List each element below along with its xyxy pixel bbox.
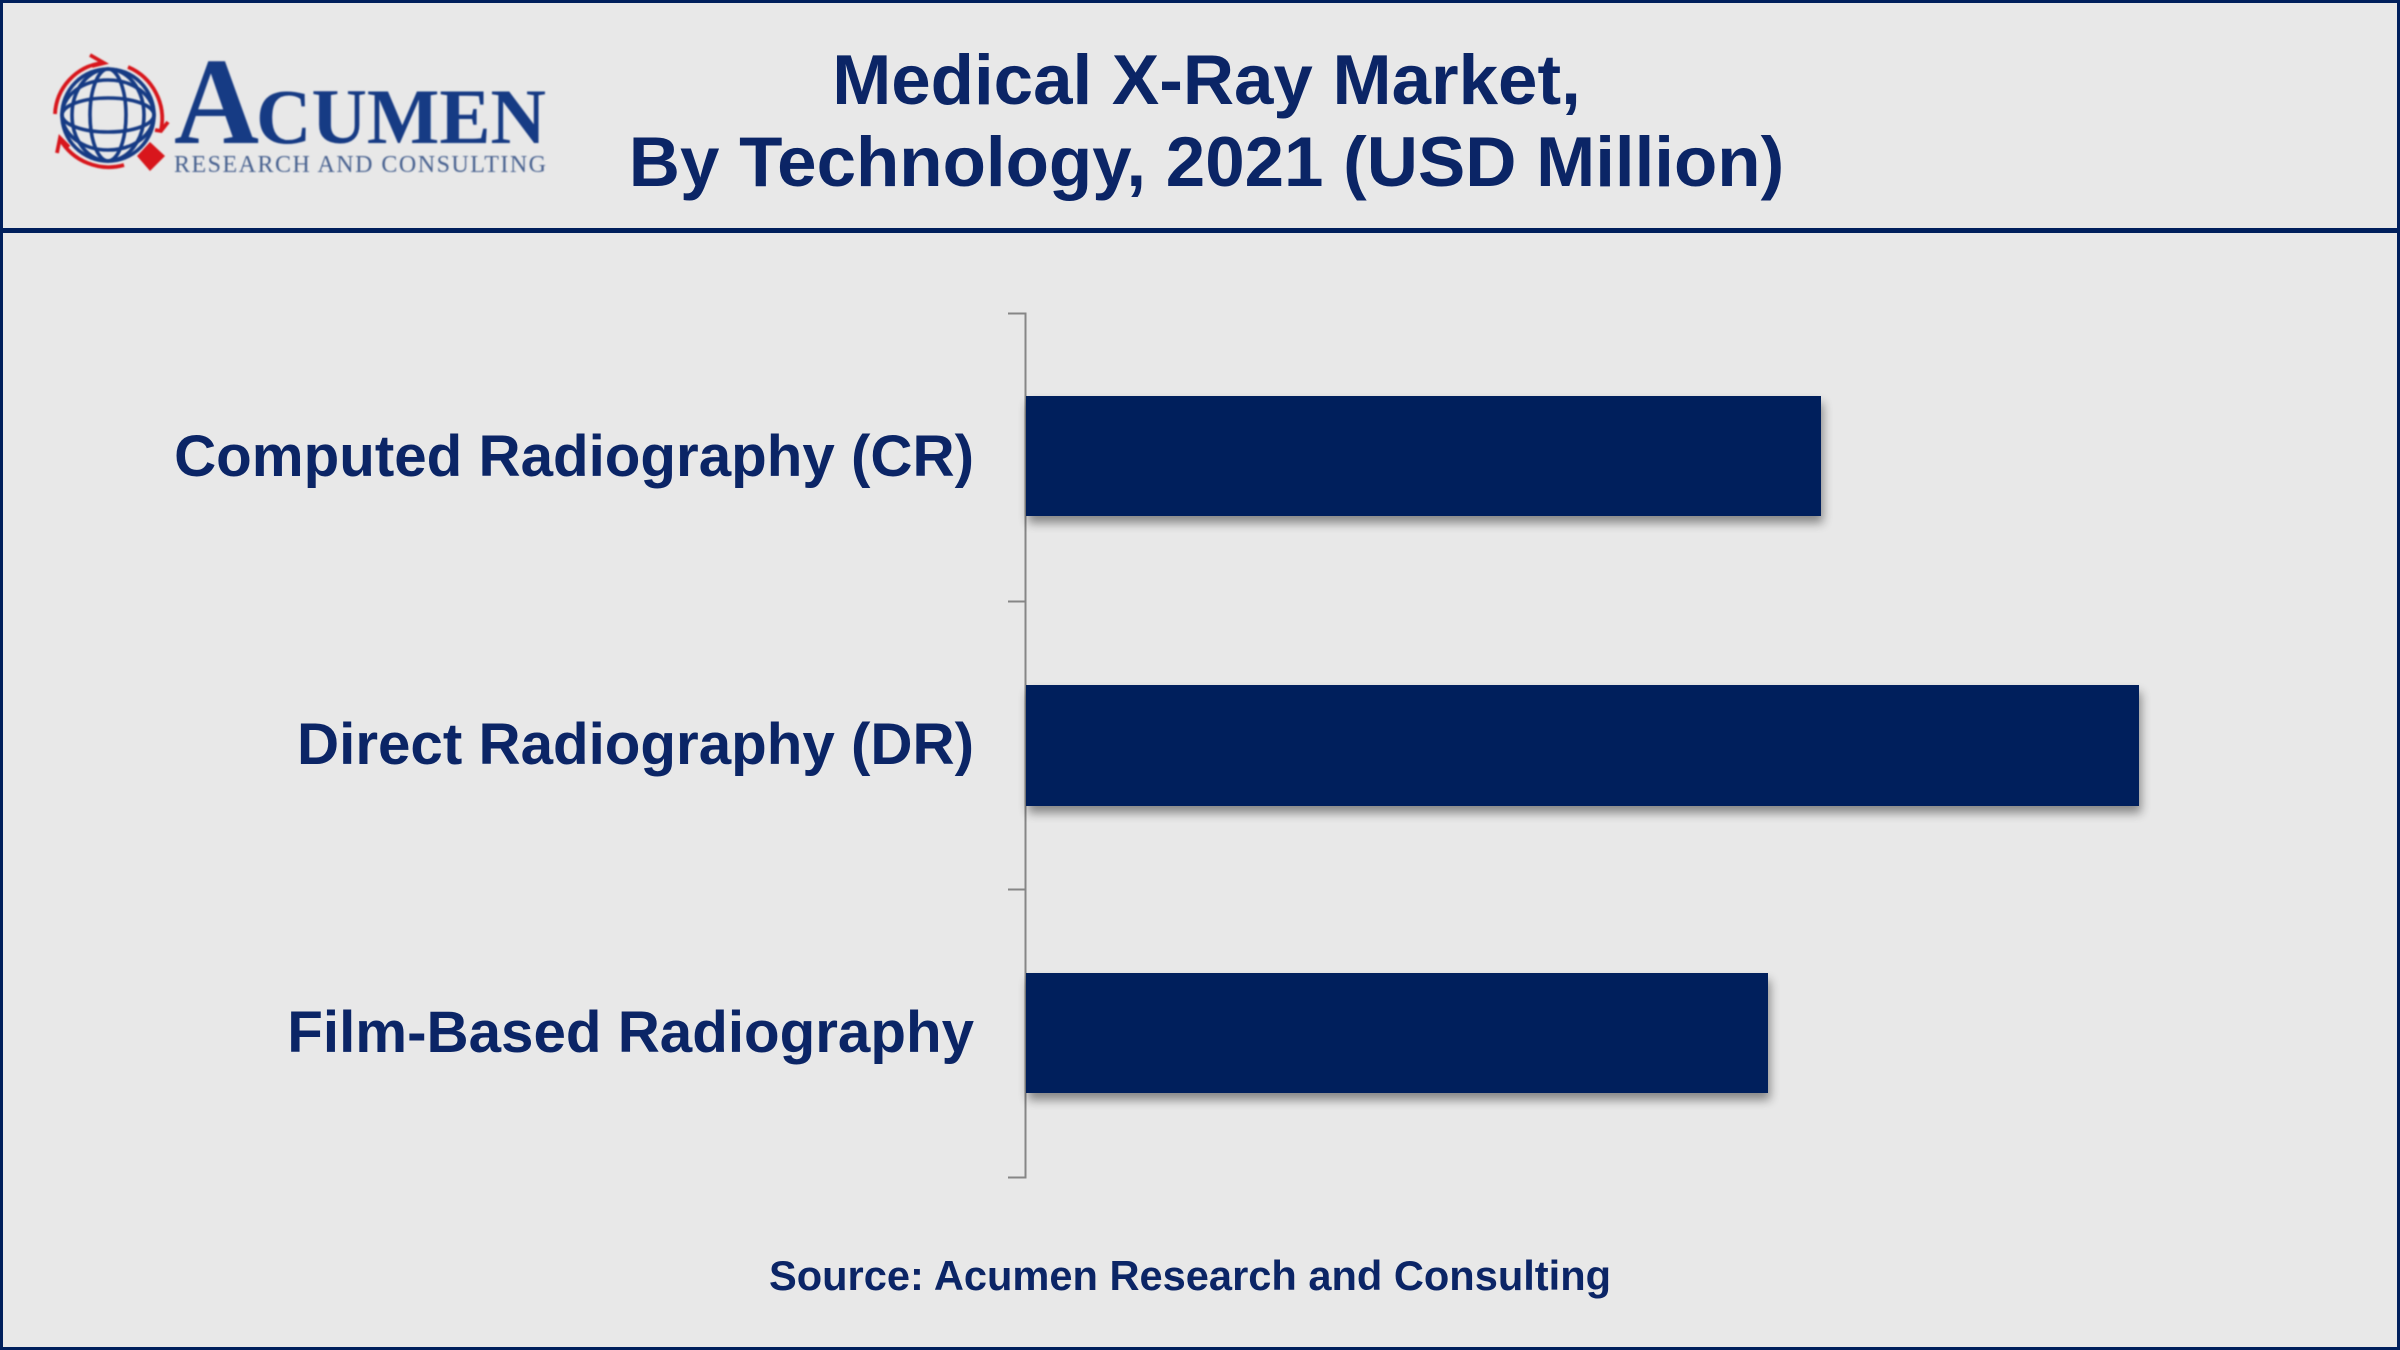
bar: Direct Radiography (DR) <box>1026 685 2141 813</box>
source note: Source: Acumen Research and Consulting <box>769 1252 1611 1299</box>
bar: Computed Radiography (CR) <box>1026 396 1823 523</box>
title: Medical X-Ray Market, <box>832 41 1581 120</box>
logo: Acumen Research and Consulting <box>55 33 546 178</box>
label: Film-Based Radiography: Film-Based Radiography <box>287 1000 975 1065</box>
label: Direct Radiography (DR): Direct Radiography (DR) <box>297 712 974 777</box>
icon: red diamond <box>137 142 165 171</box>
title: By Technology, 2021 (USD Million) <box>629 123 1784 202</box>
wordmark: Acumen: A <box>174 33 259 170</box>
icon: globe <box>62 69 154 161</box>
wordmark: Research and Consulting: RESEARCH AND CONSULTING <box>174 152 546 178</box>
icon: red arrows around globe <box>55 55 168 167</box>
bar chart <box>174 314 2141 1178</box>
chart axis <box>1008 314 1026 1178</box>
header divider <box>0 228 2400 233</box>
wordmark: Acumen: CUMEN <box>256 73 546 160</box>
bar: Film-Based Radiography <box>1026 973 1770 1100</box>
label: Computed Radiography (CR): Computed Radiography (CR) <box>174 424 974 489</box>
